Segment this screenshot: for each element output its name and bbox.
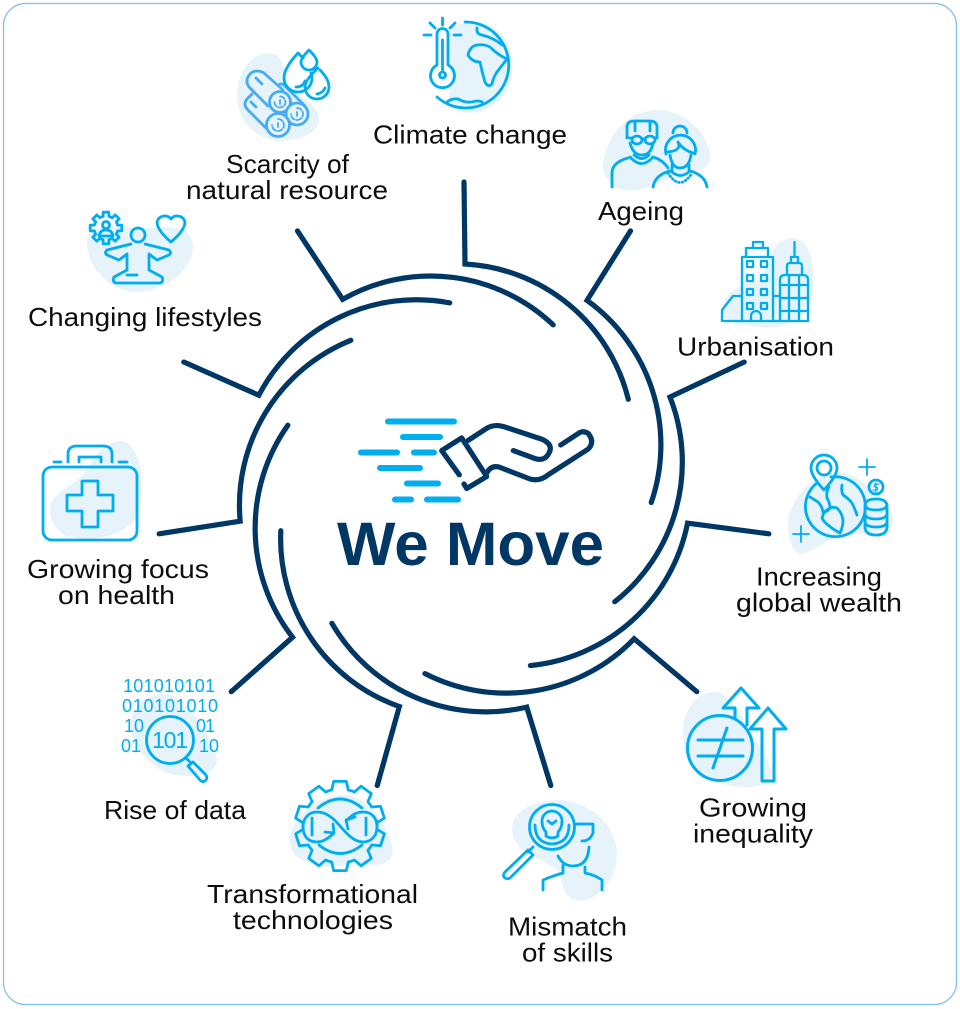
label: increasing global wealth: global wealth	[736, 588, 902, 618]
label: growing inequality: inequality	[693, 818, 813, 848]
title: We Move: We Move	[337, 510, 604, 578]
spoke: changing lifestyles	[184, 213, 450, 452]
icon: inequality sign with arrows	[683, 688, 786, 787]
label: transformational technologies	[207, 879, 418, 935]
icon: binary data with magnifier	[121, 676, 219, 782]
spoke: scarcity of natural resource	[297, 142, 553, 414]
icon: meditating person with gear and heart	[87, 212, 193, 292]
label: scarcity of natural resource	[186, 149, 388, 205]
label: mismatch of skills	[508, 912, 627, 968]
icon: globe with map pin and coins	[788, 455, 893, 554]
spoke: rise of data	[124, 425, 395, 692]
icon: binary data with magnifier: 010101010	[122, 696, 218, 716]
spoke: growing focus on health	[136, 340, 374, 534]
label: scarcity of natural resource: natural resource	[186, 175, 388, 205]
icon: binary data with magnifier: 01	[196, 716, 215, 736]
label: mismatch of skills: of skills	[522, 938, 613, 968]
icon: binary data with magnifier: 101	[152, 727, 188, 753]
label: growing focus on health: Growing focus	[27, 554, 209, 584]
icon: magnifier over head	[504, 800, 617, 901]
spoke: ageing	[513, 231, 769, 503]
label: growing inequality: Growing	[699, 792, 807, 822]
label: growing focus on health	[27, 554, 209, 610]
spoke: transformational technologies	[220, 531, 438, 786]
label: climate change: Climate change	[373, 120, 567, 150]
speed bars	[361, 422, 458, 500]
label: rise of data: Rise of data	[104, 795, 247, 825]
label: transformational technologies: technologies	[233, 905, 393, 935]
icon: gear with infinity loop	[290, 781, 393, 871]
icon: binary data with magnifier: 10	[199, 736, 219, 756]
label: increasing global wealth	[736, 562, 902, 618]
label: growing focus on health: on health	[58, 580, 175, 610]
icon: logs and water drops	[237, 50, 329, 141]
spiral ring with eleven spokes	[124, 142, 812, 832]
spoke: growing inequality	[425, 549, 697, 816]
icon: first aid case	[43, 441, 142, 540]
label: changing lifestyles: Changing lifestyles	[28, 302, 262, 332]
label: growing inequality	[693, 792, 813, 848]
label: ageing: Ageing	[598, 196, 684, 226]
centre logo: moving hand	[361, 422, 592, 500]
label: scarcity of natural resource: Scarcity of	[226, 149, 350, 179]
spoke: increasing global wealth	[530, 503, 769, 696]
label: urbanisation: Urbanisation	[677, 332, 834, 362]
icon: city buildings	[722, 238, 813, 328]
spoke: mismatch of skills	[332, 577, 551, 832]
hand outline	[442, 426, 592, 488]
spoke: urbanisation	[547, 362, 812, 602]
label: mismatch of skills: Mismatch	[508, 912, 627, 942]
icon: elderly couple	[603, 110, 710, 191]
icon: binary data with magnifier: 01	[121, 736, 141, 756]
label: transformational technologies: Transformational	[207, 879, 418, 909]
spoke: climate change	[464, 182, 628, 399]
icon: thermometer and globe	[424, 18, 512, 113]
label: increasing global wealth: Increasing	[756, 562, 882, 592]
icon: binary data with magnifier: 10	[124, 716, 144, 736]
icon: binary data with magnifier: 101010101	[123, 676, 215, 696]
